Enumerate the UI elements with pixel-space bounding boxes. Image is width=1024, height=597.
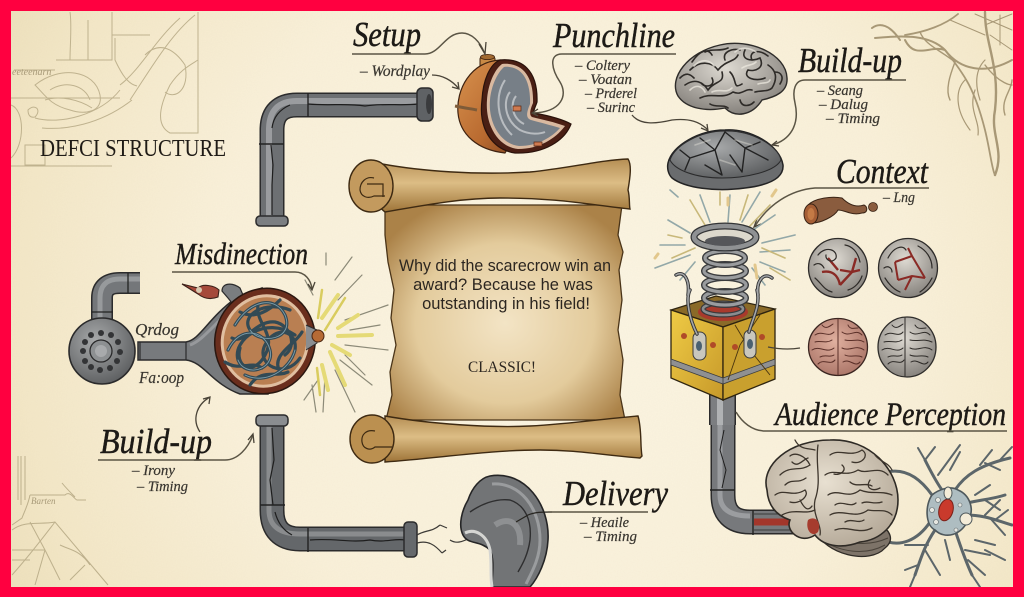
brain: red veins a <box>808 238 868 298</box>
yellow box <box>671 296 800 400</box>
list: setup <box>359 63 459 89</box>
classic text: CLASSIC! <box>468 359 536 376</box>
valve wheel <box>69 318 135 384</box>
top roll <box>372 159 630 212</box>
list: build-up right: – Seang <box>816 83 863 99</box>
heading: defect structure: DEFCI STRUCTURE <box>40 136 226 162</box>
list: left build-up: – Irony <box>131 463 175 479</box>
brain: top gray <box>675 43 787 114</box>
joke text: award? Because he was <box>413 276 593 294</box>
neuron <box>883 445 1012 587</box>
heading: context <box>754 152 929 227</box>
brains: small row two <box>808 317 936 377</box>
heading: context: – Lng <box>882 190 915 206</box>
heading: build-up left: Build-up <box>100 422 212 461</box>
heading: build-up left <box>98 397 254 495</box>
brain: red veins b <box>878 238 938 298</box>
list: setup: – Wordplay <box>359 63 431 80</box>
ear: delivery <box>461 475 552 587</box>
heading: context: Context <box>836 152 929 191</box>
list: punchline: – Surinc <box>586 100 635 116</box>
device: setup copper chamber <box>455 54 571 153</box>
pipe: top elbow <box>256 88 433 226</box>
list: build-up right <box>816 83 881 127</box>
nozzle with red tip <box>222 284 246 308</box>
joke text: outstanding in his field! <box>422 295 590 313</box>
bottom roll <box>385 416 642 462</box>
label: faoop: Fa:oop <box>138 368 184 387</box>
big brain <box>766 440 898 556</box>
pipe: under box to big brain <box>710 385 810 535</box>
cut chamber <box>201 275 329 407</box>
heading: delivery: Delivery <box>562 474 668 513</box>
body cone <box>138 288 268 394</box>
list: delivery <box>579 515 637 545</box>
heading: build-up right <box>772 41 906 146</box>
list: build-up right: – Dalug <box>818 97 869 113</box>
brain: pink <box>808 318 868 376</box>
icon: small copper pipe <box>804 197 878 224</box>
list: punchline: – Prderel <box>584 86 637 102</box>
joke text: Why did the scarecrow win an <box>399 257 611 275</box>
latches <box>676 274 772 334</box>
heading: setup: Setup <box>353 15 421 54</box>
scroll body <box>385 205 625 420</box>
heading: build-up right: Build-up <box>798 41 902 80</box>
list: delivery: – Timing <box>583 529 637 545</box>
list: punchline: – Voatan <box>578 72 632 88</box>
spring <box>694 226 756 315</box>
heading: misdirection: Misdinection <box>174 236 308 271</box>
list: left build-up: – Timing <box>136 479 188 495</box>
decoration: map bottom left: Barten <box>31 496 56 506</box>
heading: misdirection <box>172 236 315 290</box>
scroll <box>349 159 642 463</box>
decoration label: eeteenarn <box>12 67 51 78</box>
list: build-up right: – Timing <box>825 111 881 127</box>
device: misdirection machine <box>69 253 388 412</box>
burst <box>304 253 388 412</box>
list: punchline <box>574 58 708 131</box>
decoration: roots top right <box>872 12 1012 175</box>
label: qrdog: Qrdog <box>135 320 179 339</box>
brain: gray <box>878 317 936 377</box>
pipe: bottom elbow <box>256 415 470 557</box>
joke text <box>399 257 611 313</box>
heading: setup <box>352 15 486 54</box>
brains: small row one <box>808 238 938 298</box>
list: delivery: – Heaile <box>579 515 629 531</box>
heading: punchline <box>532 16 676 116</box>
heading: punchline: Punchline <box>552 16 675 55</box>
chamber cut face <box>481 60 571 153</box>
upper elbow <box>92 273 140 320</box>
decoration: map bottom left <box>12 456 108 585</box>
spark burst around spring <box>655 190 795 285</box>
decoration: schematic top left <box>11 12 198 166</box>
list: punchline: – Coltery <box>574 58 630 74</box>
brain: flattened cracked <box>668 130 783 190</box>
list: left build-up <box>131 463 188 495</box>
